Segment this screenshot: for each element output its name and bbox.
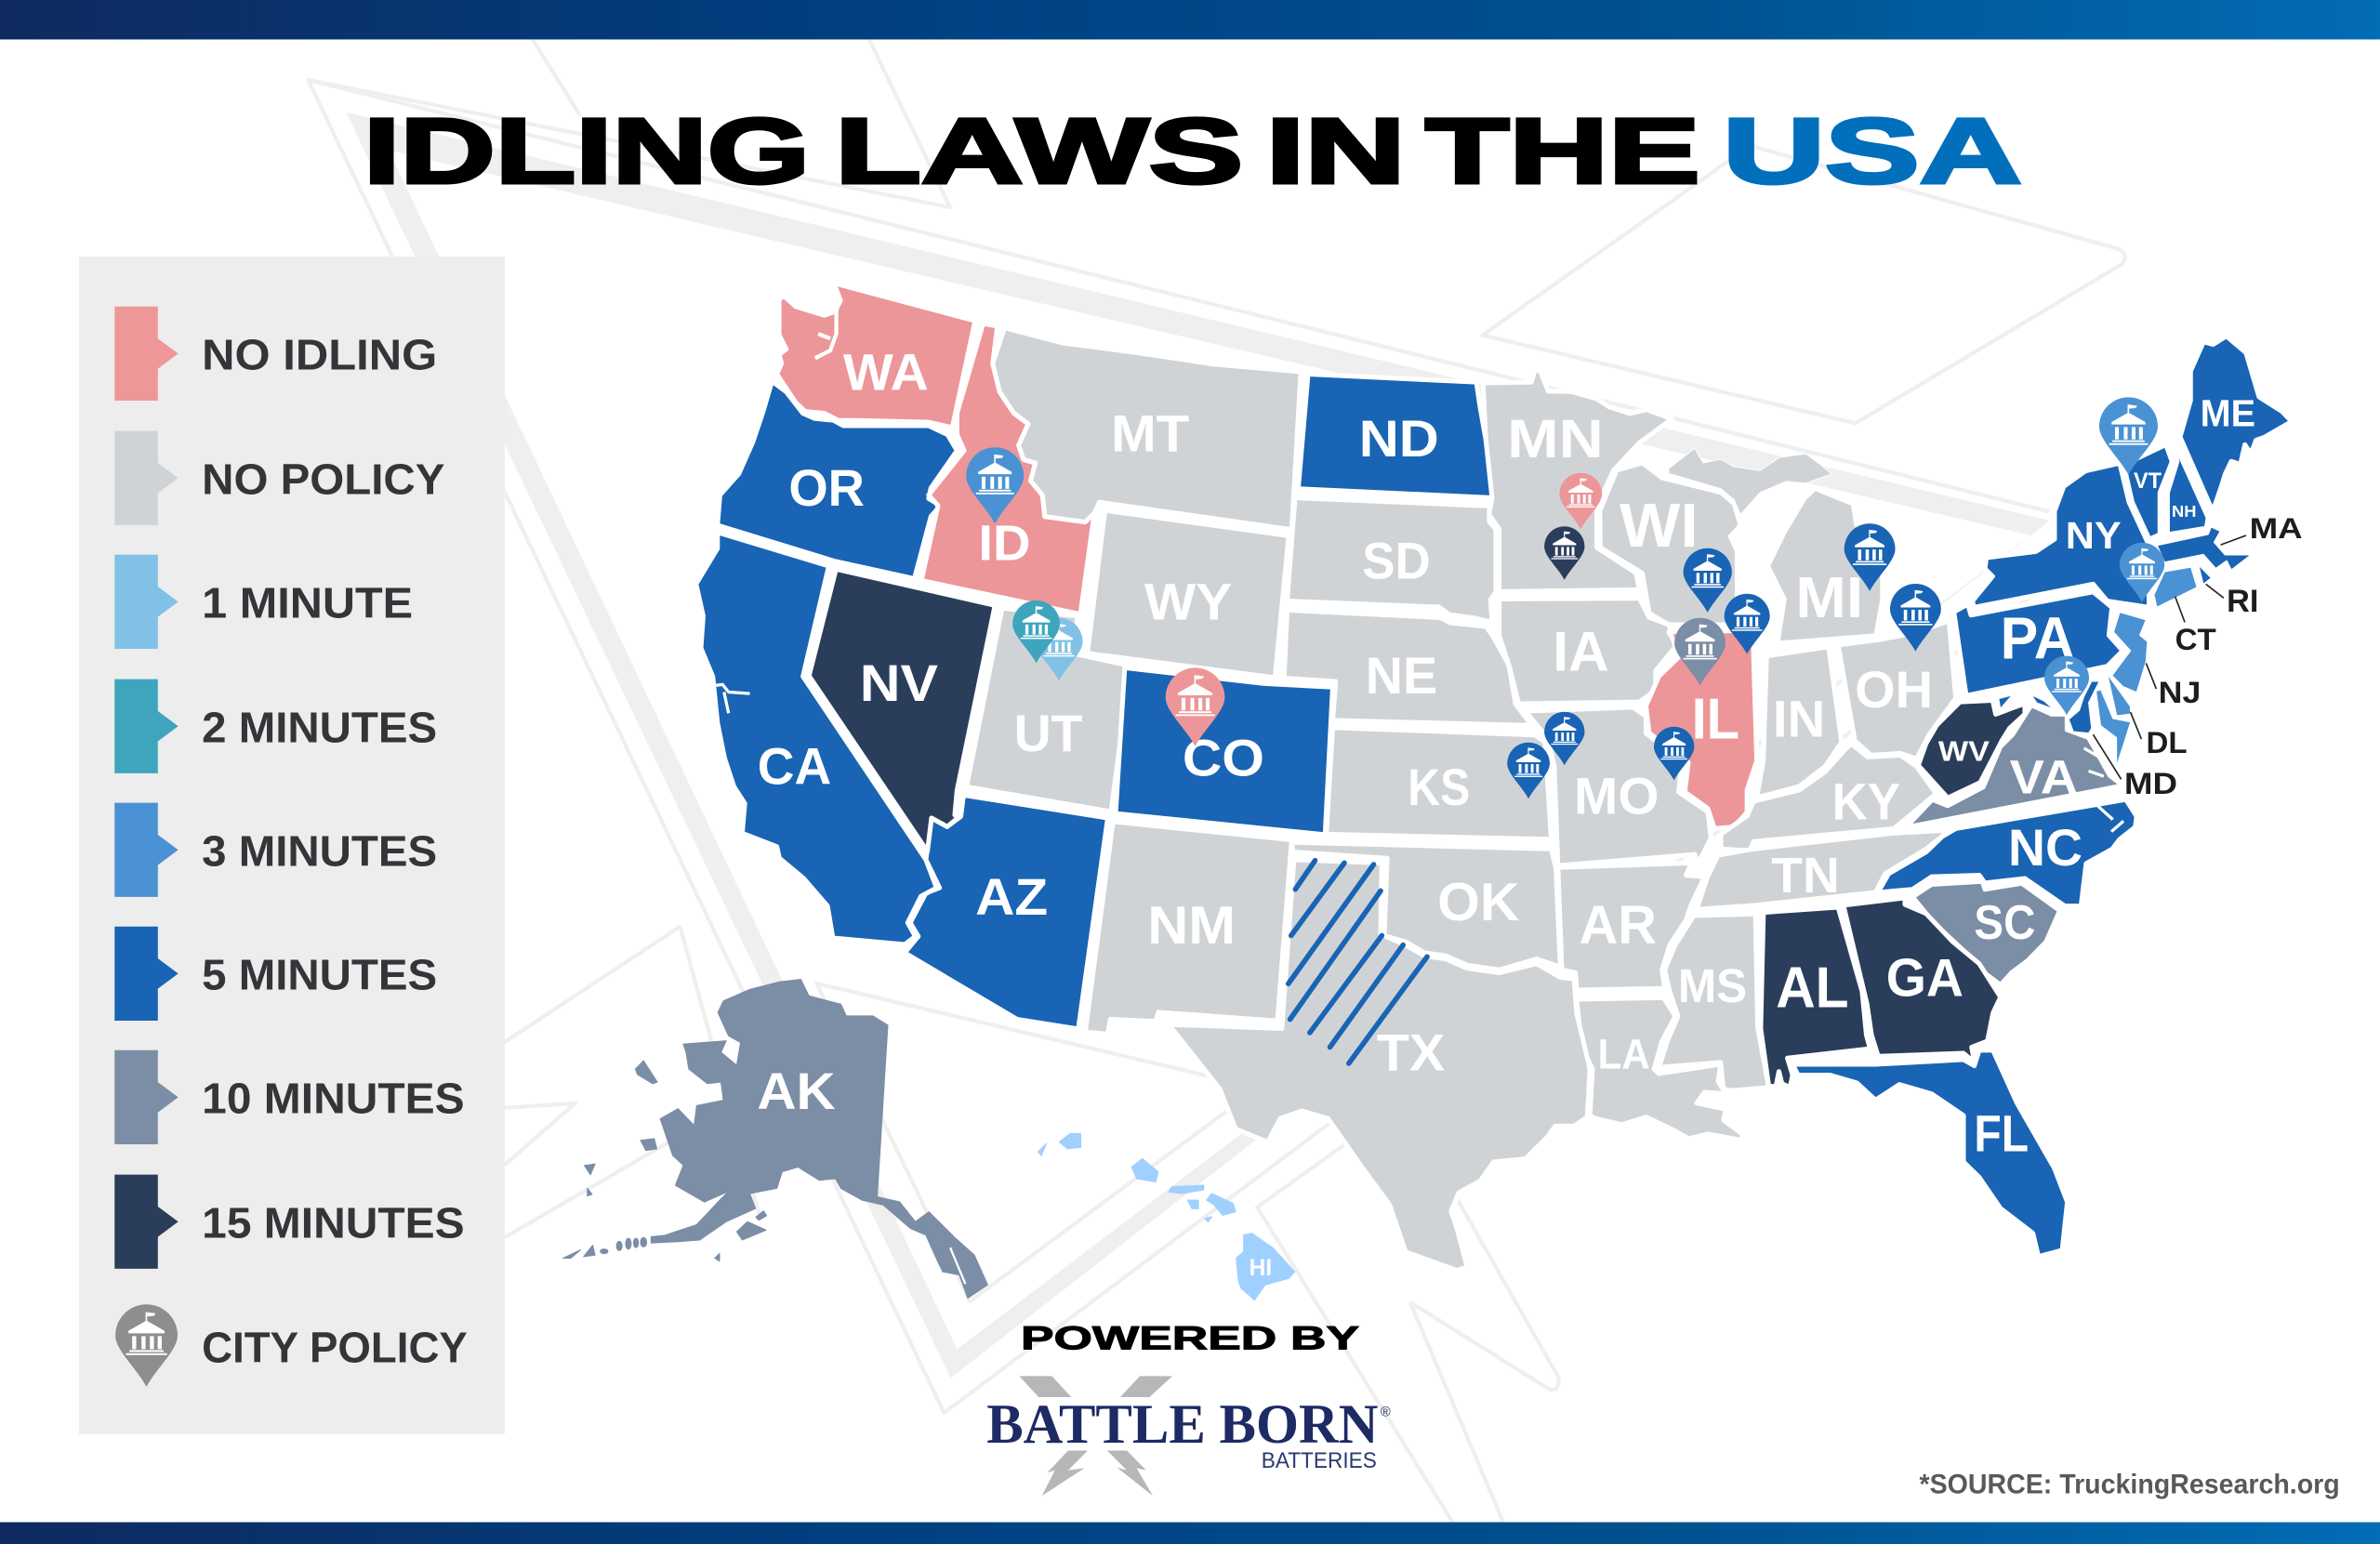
- state: AK: AK: [757, 1062, 836, 1120]
- state: MS: MS: [1678, 959, 1747, 1012]
- state: MO: MO: [1574, 768, 1659, 825]
- state: MN: [1483, 369, 1673, 591]
- state: NH: [2167, 440, 2208, 534]
- outer state labels with leader lines: CT: [2175, 622, 2216, 656]
- battle born logo: BATTLE BORN: [986, 1393, 1378, 1456]
- state: IL: IL: [1692, 688, 1739, 752]
- pin: Michigan: [1844, 523, 1896, 591]
- pin: Missouri: [1654, 727, 1694, 780]
- battle born logo: [986, 1376, 1391, 1496]
- outer state labels with leader lines: [2093, 512, 2303, 800]
- state: OH: [1838, 621, 1956, 759]
- legend: 10 minutes: 10 MINUTES: [202, 1075, 465, 1123]
- state: NV: [809, 569, 995, 851]
- state: AZ: AZ: [975, 868, 1048, 926]
- legend: 1 minute: 1 MINUTE: [202, 578, 413, 627]
- state: AR: [1558, 863, 1704, 990]
- state: WY: WY: [1144, 573, 1232, 630]
- state: NV: NV: [860, 654, 938, 712]
- state: WY: [1088, 510, 1289, 678]
- pin: New York: [2120, 543, 2164, 602]
- state: UT: UT: [1014, 705, 1083, 762]
- state: MI upper peninsula: [1669, 448, 1831, 514]
- state: MT: [993, 328, 1301, 530]
- legend: no idling: [114, 307, 437, 401]
- state: NM: NM: [1147, 896, 1236, 956]
- state: MA: [2157, 527, 2252, 570]
- legend: no idling: NO IDLING: [202, 331, 437, 379]
- state: NY: [1973, 463, 2149, 607]
- legend: 15 minutes: [114, 1175, 465, 1269]
- state: ND: ND: [1359, 410, 1439, 468]
- state: IL: [1646, 630, 1757, 828]
- state: SD: [1287, 498, 1496, 622]
- state: CO: [1116, 667, 1332, 835]
- state: OK: [1291, 842, 1560, 970]
- state: UT: [967, 608, 1130, 812]
- state: AL: AL: [1776, 956, 1849, 1020]
- state: FL: [1792, 1050, 2068, 1257]
- state: RI: [2199, 565, 2211, 584]
- state: WA: WA: [843, 344, 929, 402]
- state: AL: [1761, 907, 1870, 1088]
- legend: city policy: [115, 1304, 468, 1387]
- legend: no policy: NO POLICY: [202, 455, 444, 503]
- texas panhandle hatching: [1289, 861, 1427, 1063]
- state: IA: IA: [1553, 620, 1609, 683]
- pin: Wisconsin: [1684, 548, 1732, 613]
- state: HI: [1038, 1134, 1294, 1300]
- pin: Kansas: [1507, 743, 1550, 798]
- legend: 5 minutes: 5 MINUTES: [202, 950, 437, 998]
- state: ID: ID: [978, 515, 1031, 571]
- state: WV: [1918, 700, 2025, 798]
- state: VT: [2125, 444, 2172, 539]
- pin: Minnesota 15 minutes: [1544, 526, 1584, 580]
- legend: 15 minutes: 15 MINUTES: [202, 1198, 465, 1247]
- state: GA: GA: [1886, 949, 1964, 1009]
- legend: 2 minutes: [114, 680, 437, 773]
- outer state labels with leader lines: NJ: [2159, 675, 2201, 709]
- state: SC: [1912, 881, 2060, 985]
- state: OR: [718, 381, 957, 579]
- state: WI: WI: [1620, 491, 1699, 561]
- pin: Minnesota no idling: [1559, 473, 1602, 529]
- state: MI lower peninsula: [1770, 491, 1881, 641]
- state: OR: OR: [788, 459, 865, 517]
- state: NY: NY: [2066, 514, 2122, 557]
- state: GA: [1844, 898, 2001, 1062]
- state: TN: TN: [1771, 848, 1840, 904]
- state: NC: NC: [2008, 819, 2082, 877]
- state: IA: [1500, 599, 1675, 704]
- state: KY: [1721, 744, 1937, 851]
- state: AR: AR: [1580, 895, 1657, 956]
- state: ME: [2180, 337, 2292, 511]
- background angular line pattern: [308, 39, 2125, 1523]
- battle born logo: BATTERIES: [1262, 1449, 1377, 1473]
- state: LA: LA: [1598, 1030, 1650, 1077]
- state: ID: [921, 323, 1094, 614]
- state: VA: [1906, 705, 2122, 827]
- legend: 10 minutes: [114, 1050, 465, 1144]
- title: LAWS: [835, 100, 1243, 204]
- state: ME: ME: [2201, 391, 2255, 434]
- state: TX: TX: [1377, 1024, 1445, 1082]
- legend panel: [79, 257, 505, 1434]
- state: VA: VA: [2010, 749, 2078, 803]
- outer state labels with leader lines: MD: [2124, 766, 2177, 800]
- pin: Utah 1 minute: [1036, 618, 1083, 680]
- state: AZ: [905, 795, 1108, 1029]
- pin: Idaho: [966, 447, 1024, 523]
- city policy pins: [966, 397, 2164, 798]
- state: PA: [1954, 592, 2122, 695]
- top gradient bar: [0, 0, 2380, 39]
- legend: city policy: CITY POLICY: [202, 1323, 468, 1371]
- state: CO: CO: [1183, 729, 1264, 786]
- pin: Vermont / northern New York: [2099, 397, 2158, 475]
- state: LA: [1577, 997, 1742, 1141]
- state: KS: [1327, 728, 1552, 839]
- state: KY: KY: [1832, 773, 1900, 831]
- title: THE: [1425, 100, 1700, 204]
- state: MI lower peninsula: MI: [1795, 566, 1863, 630]
- state: NC: [1878, 799, 2136, 906]
- outer state labels with leader lines: MA: [2250, 512, 2303, 545]
- legend: 5 minutes: [114, 927, 437, 1021]
- pin: Ohio: [1890, 584, 1941, 652]
- title: [364, 100, 2022, 204]
- state: KS: KS: [1408, 759, 1470, 816]
- battle born logo: ®: [1381, 1405, 1391, 1419]
- state: WV: WV: [1938, 736, 1990, 767]
- pin: Pennsylvania: [2044, 656, 2089, 715]
- state: PA: PA: [2001, 605, 2075, 671]
- legend: no policy: [114, 431, 444, 525]
- state: NH: NH: [2172, 502, 2196, 521]
- state: OH: OH: [1855, 661, 1933, 719]
- title: USA: [1723, 100, 2022, 204]
- outer state labels with leader lines: RI: [2227, 584, 2258, 619]
- state: MS: [1659, 914, 1769, 1090]
- state: WI: [1600, 463, 1740, 625]
- powered by text: POWERED BY: [1021, 1320, 1359, 1356]
- state: ND: [1298, 374, 1493, 498]
- bottom gradient bar: [0, 1523, 2380, 1544]
- source note: *SOURCE: TruckingResearch.org: [1919, 1470, 2340, 1500]
- eastern shore: [2096, 690, 2131, 765]
- title: IN: [1266, 100, 1406, 204]
- state: NE: [1284, 610, 1531, 725]
- legend: 3 minutes: 3 MINUTES: [202, 826, 437, 875]
- pin: Kansas City: [1544, 712, 1584, 765]
- state: NE: NE: [1366, 647, 1437, 705]
- state: MT: MT: [1111, 405, 1189, 463]
- state: NM: [1085, 822, 1291, 1034]
- state: WA: [777, 284, 975, 428]
- pin: Utah 2 minutes: [1012, 600, 1060, 663]
- state: MN: MN: [1507, 409, 1604, 469]
- pin: Chicago: [1725, 594, 1770, 654]
- state: TN: [1697, 830, 1949, 909]
- legend: 2 minutes: 2 MINUTES: [202, 703, 437, 751]
- state: TX: [1169, 860, 1590, 1271]
- state: SC: SC: [1974, 896, 2035, 950]
- state: DE: [2108, 674, 2131, 716]
- state: SD: SD: [1362, 533, 1431, 590]
- state: FL: FL: [1974, 1104, 2029, 1162]
- state: VT: VT: [2134, 469, 2162, 494]
- title: IDLING: [364, 100, 810, 204]
- us map: [563, 284, 2292, 1300]
- state: IN: IN: [1773, 691, 1825, 748]
- state: MD: [1999, 681, 2099, 733]
- state: CA: [696, 533, 936, 944]
- state: AK: [563, 980, 987, 1299]
- state: CT: [2154, 567, 2197, 607]
- state: OK: OK: [1437, 873, 1519, 932]
- state: CA: CA: [758, 737, 831, 795]
- state: IN: [1757, 647, 1842, 798]
- legend: 1 minute: [114, 555, 413, 649]
- state: NJ: [2112, 612, 2148, 693]
- legend: 3 minutes: [114, 803, 437, 897]
- pin: Colorado: [1166, 667, 1224, 746]
- state: MO: [1526, 707, 1711, 865]
- outer state labels with leader lines: DL: [2147, 725, 2188, 759]
- state: HI: HI: [1250, 1255, 1272, 1281]
- pin: Illinois 10 minutes: [1674, 618, 1726, 685]
